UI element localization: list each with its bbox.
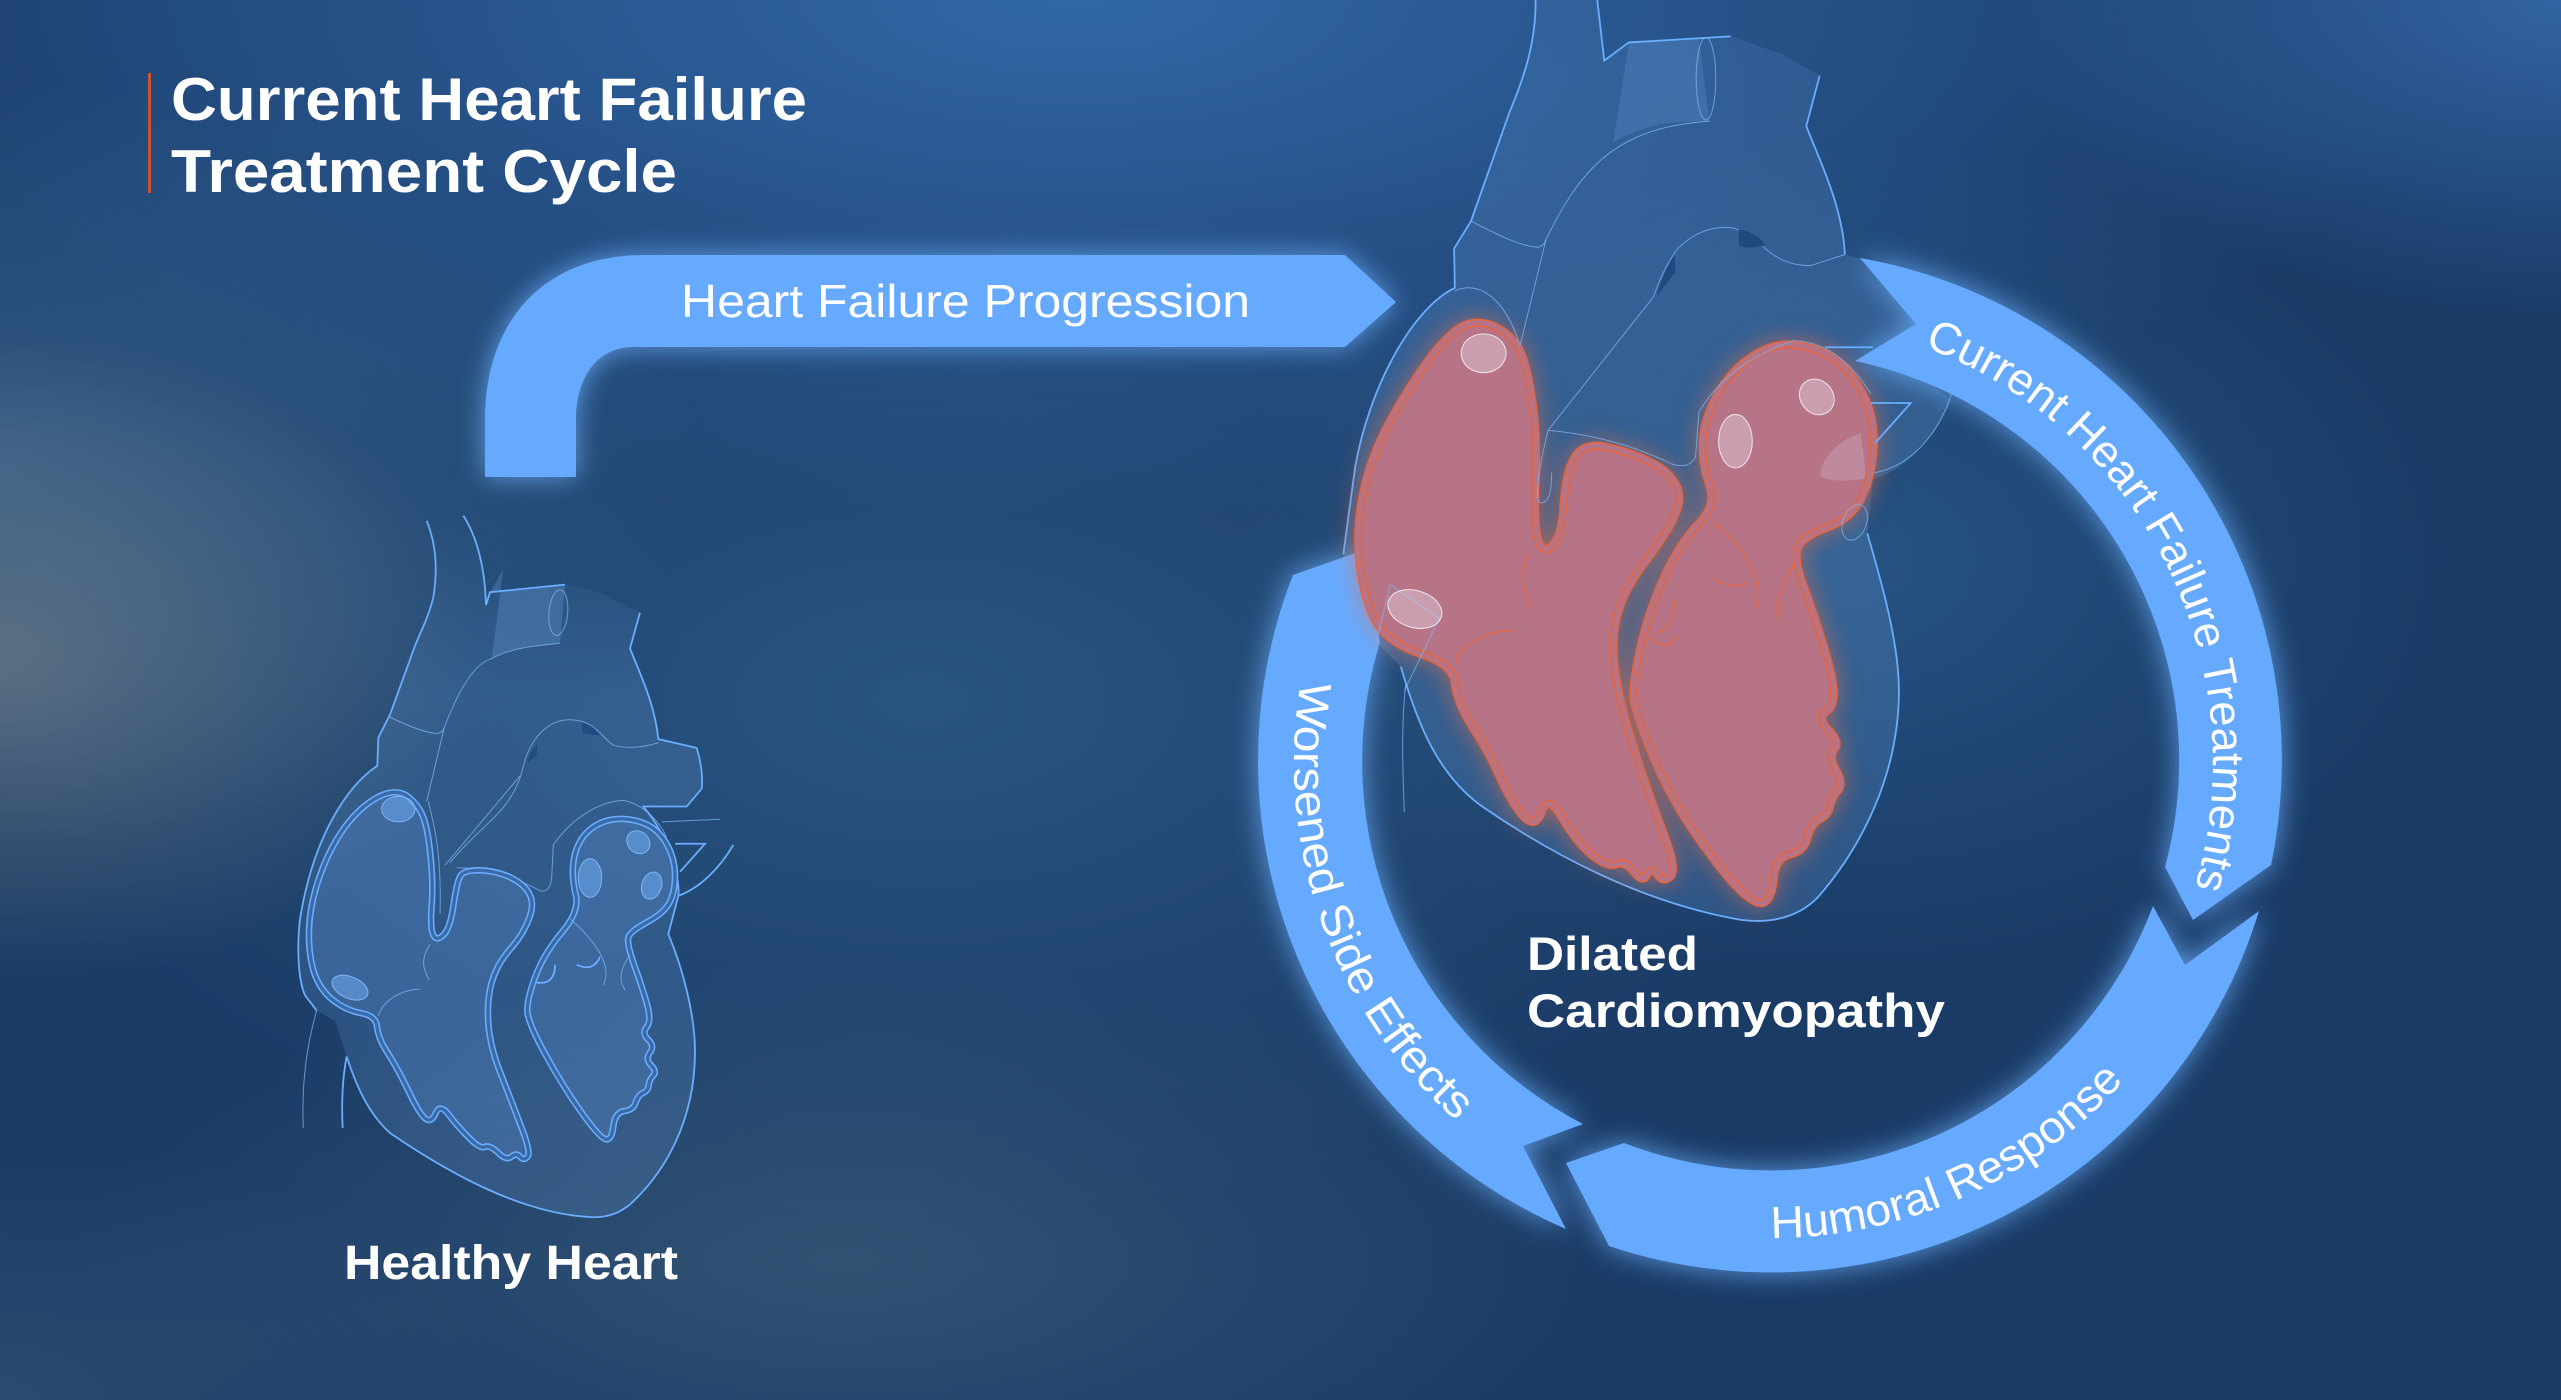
label: dilated cardiomyopathy: Dilated <box>1527 927 1698 980</box>
dilated heart aorta band <box>1613 39 1709 142</box>
dilated heart valves <box>1381 328 1872 636</box>
dilated heart papillary lines <box>1457 521 1794 664</box>
healthy heart illustration <box>298 516 733 1217</box>
arrow: current heart failure treatments <box>1855 258 2282 920</box>
arrow: heart failure progression <box>485 255 1396 477</box>
label: healthy heart: Healthy Heart <box>344 1237 678 1290</box>
title <box>148 66 807 205</box>
label: worsened side effects: Worsened Side Effects <box>1294 685 1469 1118</box>
arrow: worsened side effects <box>1258 551 1583 1229</box>
label: dilated cardiomyopathy: Cardiomyopathy <box>1527 984 1945 1037</box>
label: current heart failure treatments: Current Heart Failure Treatments <box>1930 322 2242 890</box>
healthy heart aorta band <box>490 569 565 659</box>
arrow label: Heart Failure Progression <box>681 275 1250 327</box>
dilated heart chambers <box>1358 323 1874 903</box>
healthy heart left chambers <box>527 819 675 1139</box>
dilated right chambers <box>1358 323 1679 880</box>
arrow: humoral response <box>1566 906 2259 1272</box>
healthy heart outer silhouette <box>298 516 702 1217</box>
healthy heart valves and papillary lines <box>331 796 665 1016</box>
cycle arrows <box>1258 258 2282 1272</box>
title accent bar <box>148 73 151 193</box>
cycle arrow labels <box>1294 322 2242 1238</box>
title text: Treatment Cycle <box>171 138 677 205</box>
healthy heart vessel lines <box>303 588 733 1128</box>
title text: Current Heart Failure <box>171 66 807 133</box>
label: humoral response: Humoral Response <box>1774 1070 2120 1238</box>
dilated left chambers <box>1633 345 1874 903</box>
dilated heart outline <box>1343 0 1899 921</box>
dilated heart silhouette <box>1343 0 1952 921</box>
healthy heart right chambers <box>309 792 532 1159</box>
dilated heart vessels and valves <box>1376 38 1952 812</box>
